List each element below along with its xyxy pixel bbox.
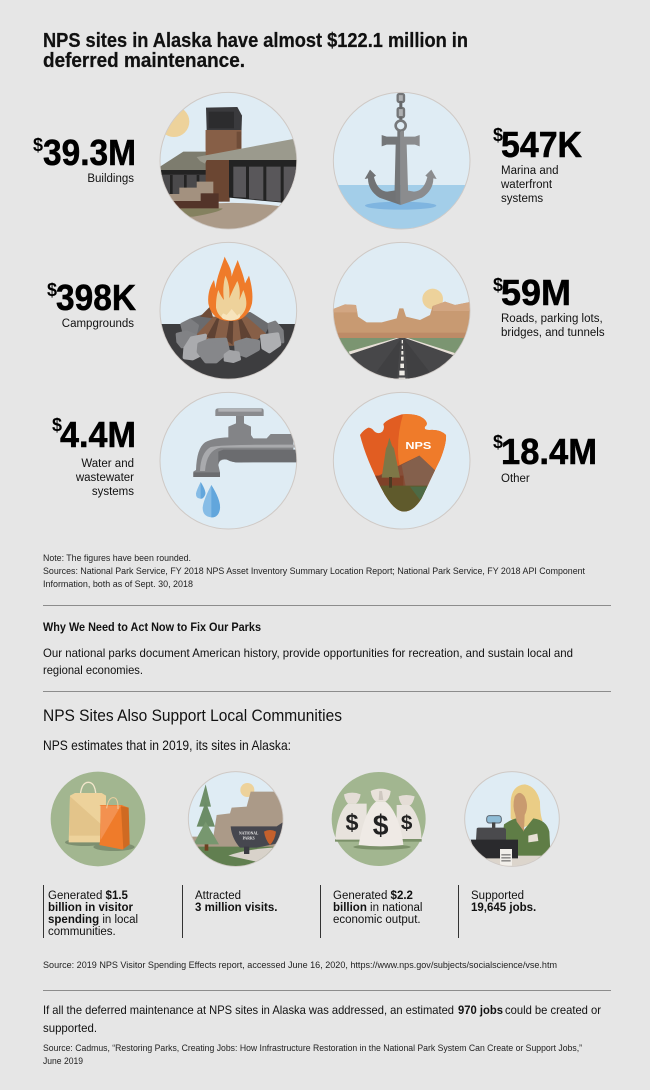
- stat: other: [493, 431, 597, 485]
- note and sources: Sources: National Park Service, FY 2018 NPS Asset Inventory Summary Location Report; National Park Service, FY 2018 API Component: [43, 566, 585, 577]
- stat: buildings: 39.3M: [43, 132, 136, 173]
- stat: water: wastewater: [75, 472, 134, 484]
- source: Cadmus: Source: Cadmus, “Restoring Parks, Creating Jobs: How Infrastructure Restoration in the National Park System Can Create or Support Jobs,”: [43, 1043, 582, 1054]
- column: visits: Attracted: [195, 890, 241, 902]
- text: jobs created: 970 jobs: [458, 1003, 503, 1017]
- stat: marina: Marina and: [501, 165, 559, 177]
- column: visitor spending: Generated $1.5: [48, 890, 129, 902]
- icon: national park sign: [187, 772, 287, 868]
- column: economic output: Generated $2.2: [333, 890, 413, 902]
- column: visitor spending: [43, 885, 138, 938]
- icon: shopping bags: [51, 772, 145, 866]
- icon: money bags: $: [373, 810, 389, 842]
- stat: campgrounds: [47, 277, 136, 330]
- stat: marina: $: [493, 125, 503, 145]
- stat: buildings: $: [33, 135, 43, 155]
- column: visitor spending: communities.: [48, 926, 116, 938]
- source: Cadmus: [43, 1043, 582, 1067]
- icon: faucet: [160, 392, 297, 529]
- stat: buildings: Buildings: [87, 173, 134, 185]
- stat: other: $: [493, 432, 503, 452]
- text: jobs created: supported.: [43, 1021, 97, 1035]
- title: deferred maintenance.: [43, 50, 245, 72]
- stat: marina: waterfront: [500, 179, 553, 191]
- stat: campgrounds: Campgrounds: [62, 318, 134, 330]
- section: why we need to act: regional economies.: [43, 663, 143, 677]
- stat: water: Water and: [81, 458, 134, 470]
- stat: marina: 547K: [501, 124, 582, 165]
- column: visits: 3 million visits.: [195, 902, 277, 914]
- icon: national park sign: NATIONAL: [239, 831, 259, 835]
- column: jobs: 19,645 jobs.: [471, 902, 536, 914]
- text: jobs created: [43, 1003, 601, 1035]
- note and sources: Note: The figures have been rounded.: [43, 553, 191, 564]
- stat: buildings: [33, 132, 136, 185]
- icon: building: [159, 92, 298, 232]
- stat: roads: 59M: [501, 272, 571, 313]
- title: NPS sites in Alaska have almost $122.1 million in: [43, 30, 468, 52]
- stat: roads: $: [493, 275, 503, 295]
- icon: cashier: [463, 772, 563, 869]
- icon: NPS arrowhead: NPS: [405, 441, 432, 452]
- stat: marina: systems: [501, 193, 543, 205]
- source: visitor spending report: Source: 2019 NPS Visitor Spending Effects report, accessed June 16, 2020, https://www.nps.gov/subjects/socialscience/vse.htm: [43, 960, 557, 971]
- icon: money bags: [332, 772, 426, 866]
- stat: water: systems: [92, 486, 134, 498]
- stat: roads: [493, 272, 605, 339]
- heading: local communities: [43, 706, 342, 753]
- note and sources: Information, both as of Sept. 30, 2018: [43, 579, 193, 590]
- icon: national park sign: PARKS: [243, 837, 255, 841]
- heading: local communities: NPS Sites Also Support Local Communities: [43, 706, 342, 725]
- stat: campgrounds: 398K: [56, 277, 136, 318]
- text: jobs created: If all the deferred maintenance at NPS sites in Alaska was addressed, an estimated: [43, 1003, 454, 1017]
- stat: other: 18.4M: [501, 431, 597, 472]
- stat: roads: Roads, parking lots,: [501, 313, 603, 325]
- heading: local communities: NPS estimates that in 2019, its sites in Alaska:: [43, 737, 291, 753]
- section: why we need to act: Why We Need to Act Now to Fix Our Parks: [43, 622, 261, 634]
- column: jobs: Supported: [471, 890, 524, 902]
- column: jobs: [458, 885, 536, 938]
- stat: marina: [493, 124, 582, 205]
- stat: water: $: [52, 415, 62, 435]
- stat: water: [52, 414, 136, 498]
- stat: campgrounds: $: [47, 280, 57, 300]
- column: visitor spending: spending in local: [48, 914, 138, 926]
- section: why we need to act: Our national parks document American history, provide opportunities for recreation, and sustain local and: [43, 646, 573, 660]
- column: economic output: [320, 885, 422, 938]
- note and sources: [43, 553, 585, 590]
- column: economic output: billion in national: [333, 902, 422, 914]
- icon: desert road: [333, 242, 473, 382]
- stat: roads: bridges, and tunnels: [501, 327, 605, 339]
- icon: anchor: [330, 92, 473, 232]
- column: visitor spending: billion in visitor: [48, 902, 134, 914]
- column: economic output: economic output.: [333, 914, 421, 926]
- icon: money bags: $: [346, 810, 359, 836]
- stat: other: Other: [501, 473, 530, 485]
- icon: money bags: $: [401, 812, 413, 835]
- icon: campfire: [157, 242, 300, 384]
- title: [43, 30, 468, 72]
- stat: water: 4.4M: [60, 414, 136, 455]
- column: visits: [182, 885, 277, 938]
- section: why we need to act: [43, 622, 573, 677]
- source: Cadmus: June 2019: [43, 1056, 83, 1067]
- icon: NPS arrowhead: [333, 392, 470, 529]
- text: jobs created: could be created or: [505, 1003, 601, 1017]
